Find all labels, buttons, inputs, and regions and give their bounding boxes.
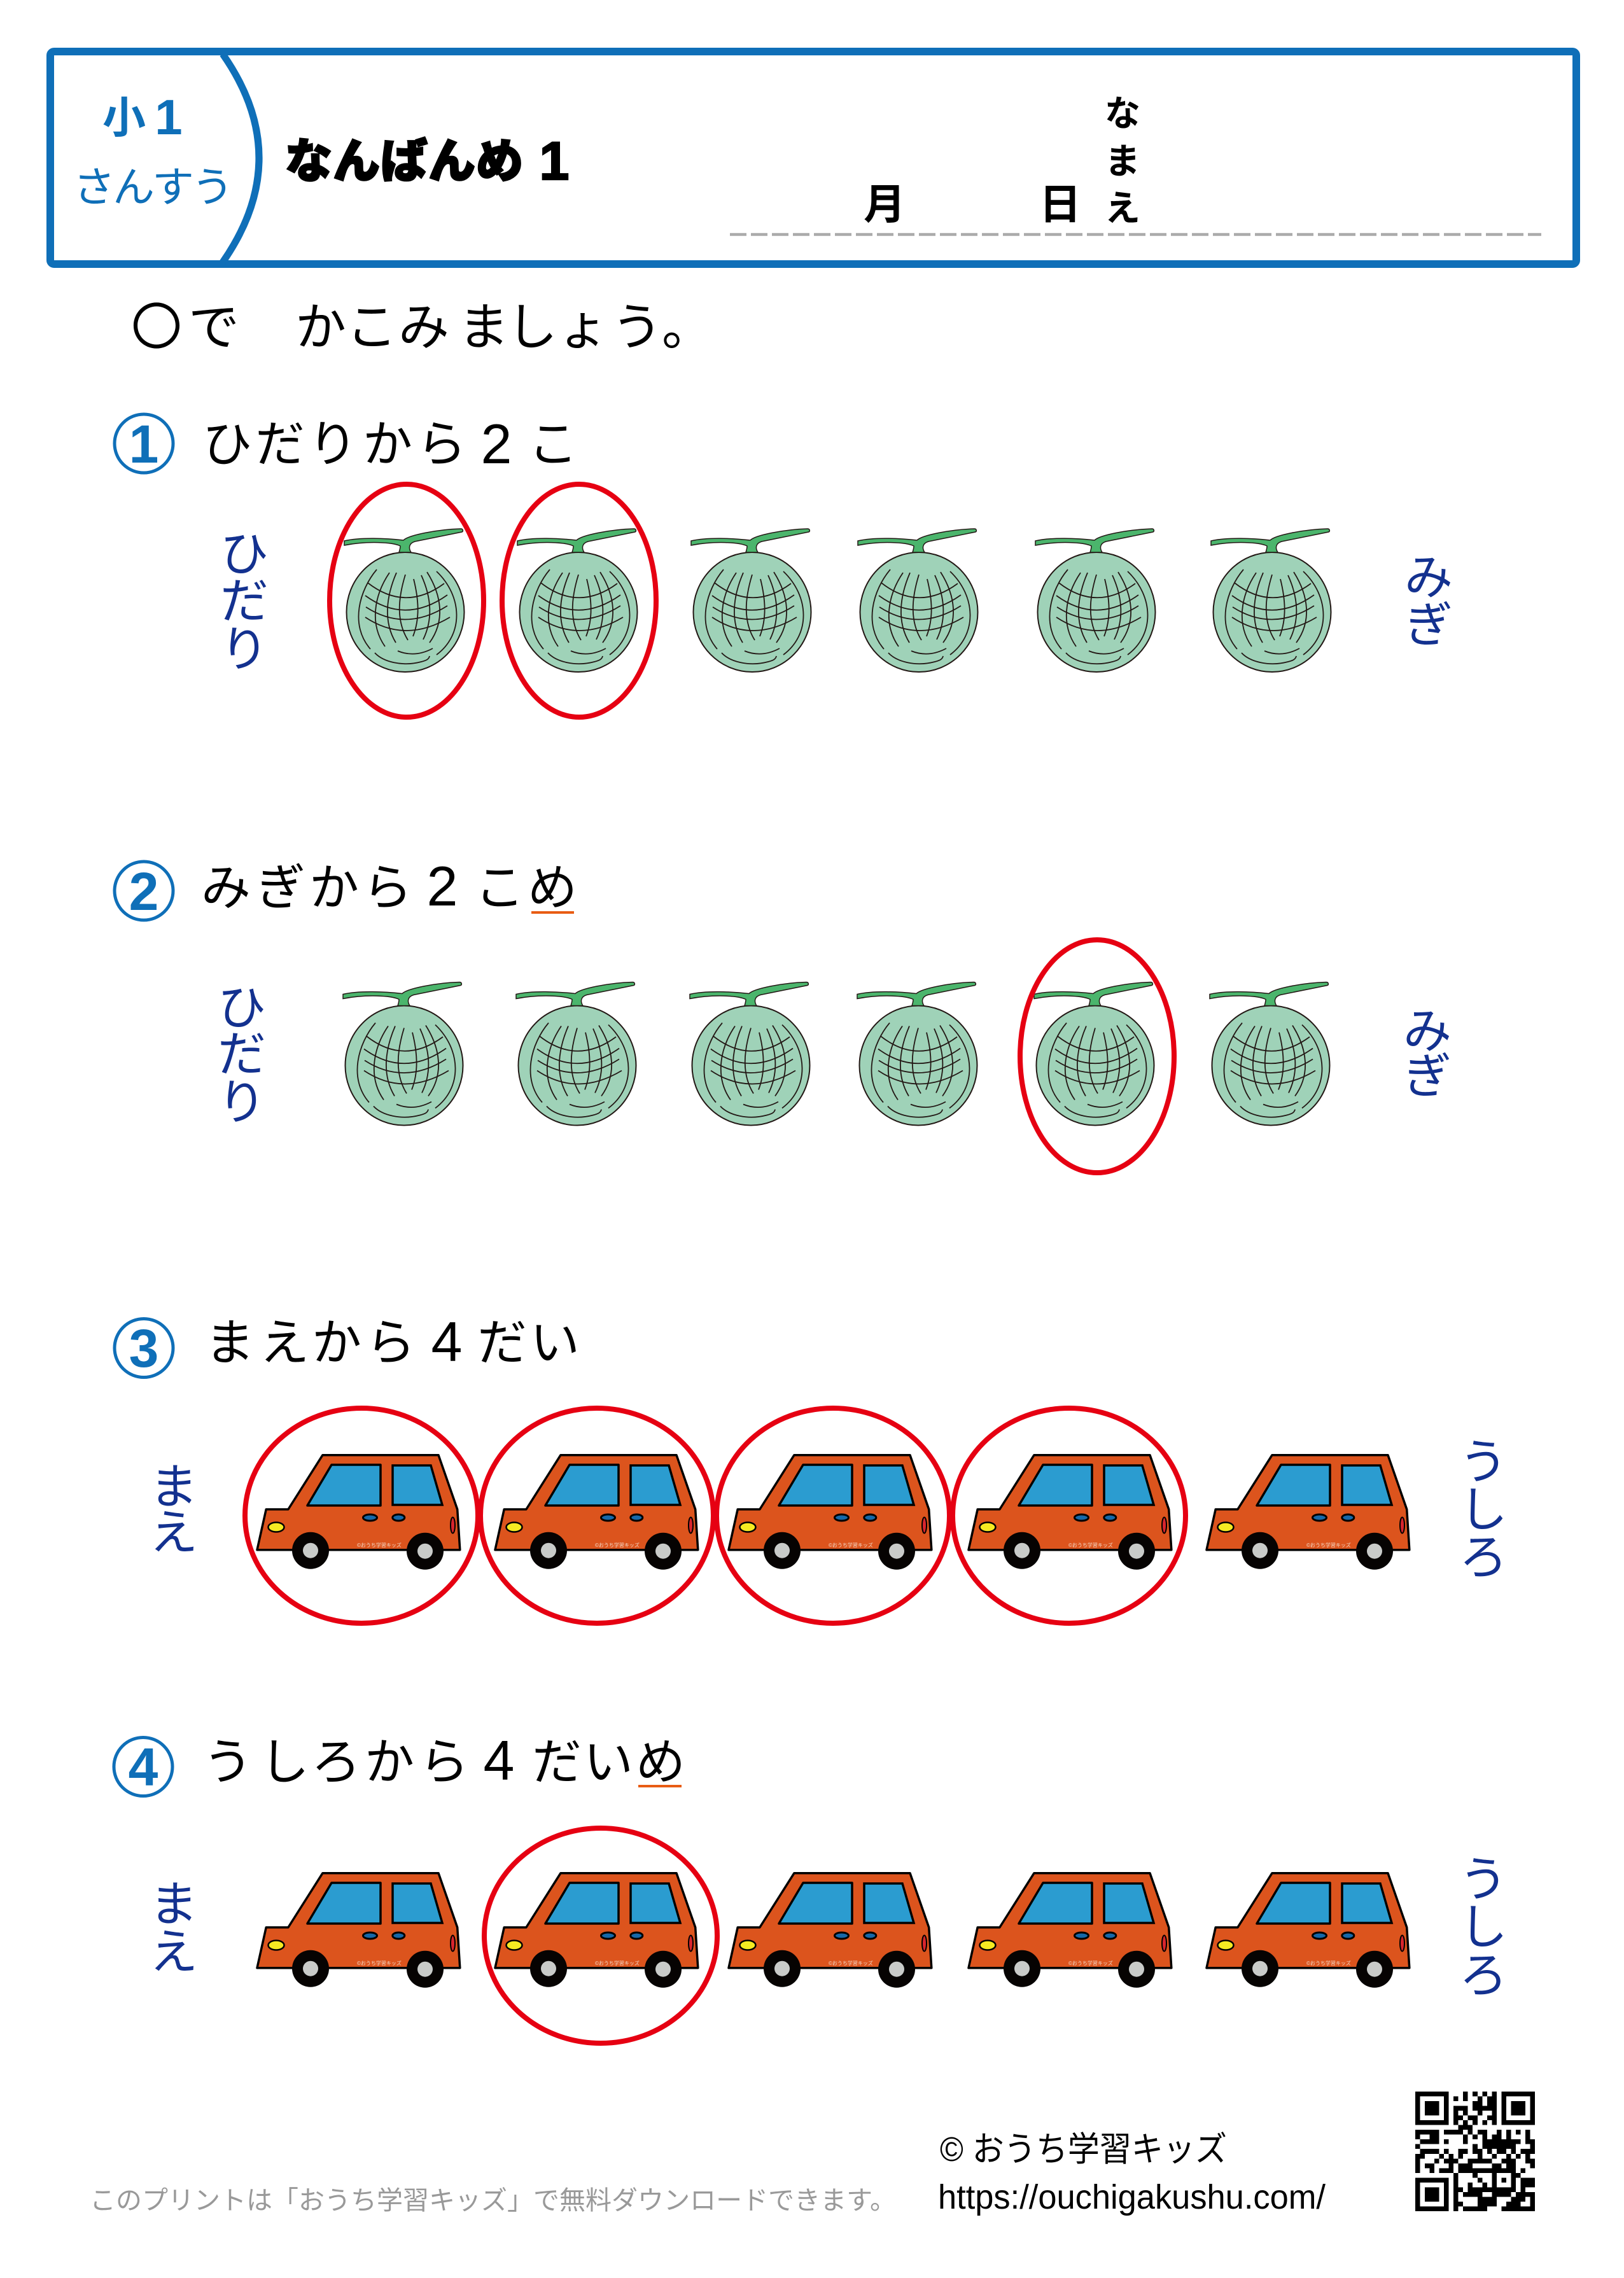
car row 3 [257, 1455, 1410, 1570]
copyright: © おうち学習キッズ [940, 2130, 1227, 2169]
header panel [50, 52, 1576, 264]
name label: なまえ [1105, 94, 1140, 228]
number badge 1: 1 [129, 414, 158, 474]
label left: ひだり [220, 528, 269, 677]
instruction: 〇でかこみましょう。 [131, 299, 713, 356]
car row 4: ©おうち学習キッズ [357, 1960, 402, 1966]
number badge 2: 2 [129, 862, 158, 921]
car row 4: ©おうち学習キッズ [1306, 1960, 1351, 1966]
label back: うしろ [1459, 1853, 1508, 2003]
number badge 4 [114, 1737, 172, 1797]
melon row 2 [343, 982, 1330, 1125]
melon row 1 [344, 529, 1331, 672]
panel: question 2 [115, 855, 1452, 1173]
label front: まえ [150, 1878, 198, 1980]
header curved divider [223, 54, 259, 262]
number badge 1 [115, 414, 173, 474]
car row 3: ©おうち学習キッズ [595, 1542, 640, 1548]
answer circles row 3 [245, 1408, 1186, 1623]
QR code [1415, 2094, 1535, 2209]
footer note: このプリントは「おうち学習キッズ」で無料ダウンロードできます。 [90, 2186, 896, 2215]
number badge 2 [115, 862, 173, 921]
grade label: 小1 [102, 89, 183, 145]
answer circle row 2 [1020, 940, 1174, 1173]
answer circle row 4 [484, 1828, 717, 2043]
subject label: さんすう [73, 164, 234, 211]
underline [531, 911, 574, 914]
name dashed line [730, 233, 1541, 236]
number badge 4: 4 [129, 1737, 158, 1797]
car row 3: ©おうち学習キッズ [1306, 1542, 1351, 1548]
month label: 月 [864, 181, 906, 228]
website url: https://ouchigakushu.com/ [938, 2178, 1326, 2216]
car row 3: ©おうち学習キッズ [1068, 1542, 1113, 1548]
label front: まえ [150, 1460, 198, 1560]
label left: ひだり [218, 981, 266, 1130]
underline [638, 1785, 682, 1787]
panel: question 4 [114, 1729, 1508, 2043]
question 4 text: うしろから 4 だいめ [203, 1729, 685, 1792]
question 1 text: ひだりから 2 こ [202, 412, 578, 475]
car row 3: ©おうち学習キッズ [357, 1542, 402, 1548]
number badge 3 [115, 1318, 173, 1378]
label right: みぎ [1404, 551, 1453, 653]
header frame [50, 52, 1576, 264]
number badge 3: 3 [129, 1318, 158, 1378]
label back: うしろ [1459, 1436, 1508, 1585]
title: なんばんめ 1 [285, 131, 569, 191]
car row 4: ©おうち学習キッズ [1068, 1960, 1113, 1966]
question 3 text: まえから 4 だい [205, 1310, 580, 1373]
panel: question 1 [115, 412, 1453, 717]
label right: みぎ [1403, 1005, 1452, 1104]
day label: 日 [1039, 181, 1081, 228]
car row 4: ©おうち学習キッズ [829, 1960, 873, 1966]
car row 4 [257, 1873, 1410, 1988]
car row 4: ©おうち学習キッズ [595, 1960, 640, 1966]
car row 3: ©おうち学習キッズ [829, 1542, 873, 1548]
panel: question 3 [115, 1310, 1508, 1623]
question 2 text: みぎから 2 こめ [201, 855, 577, 918]
answer circles row 1 [330, 484, 656, 717]
